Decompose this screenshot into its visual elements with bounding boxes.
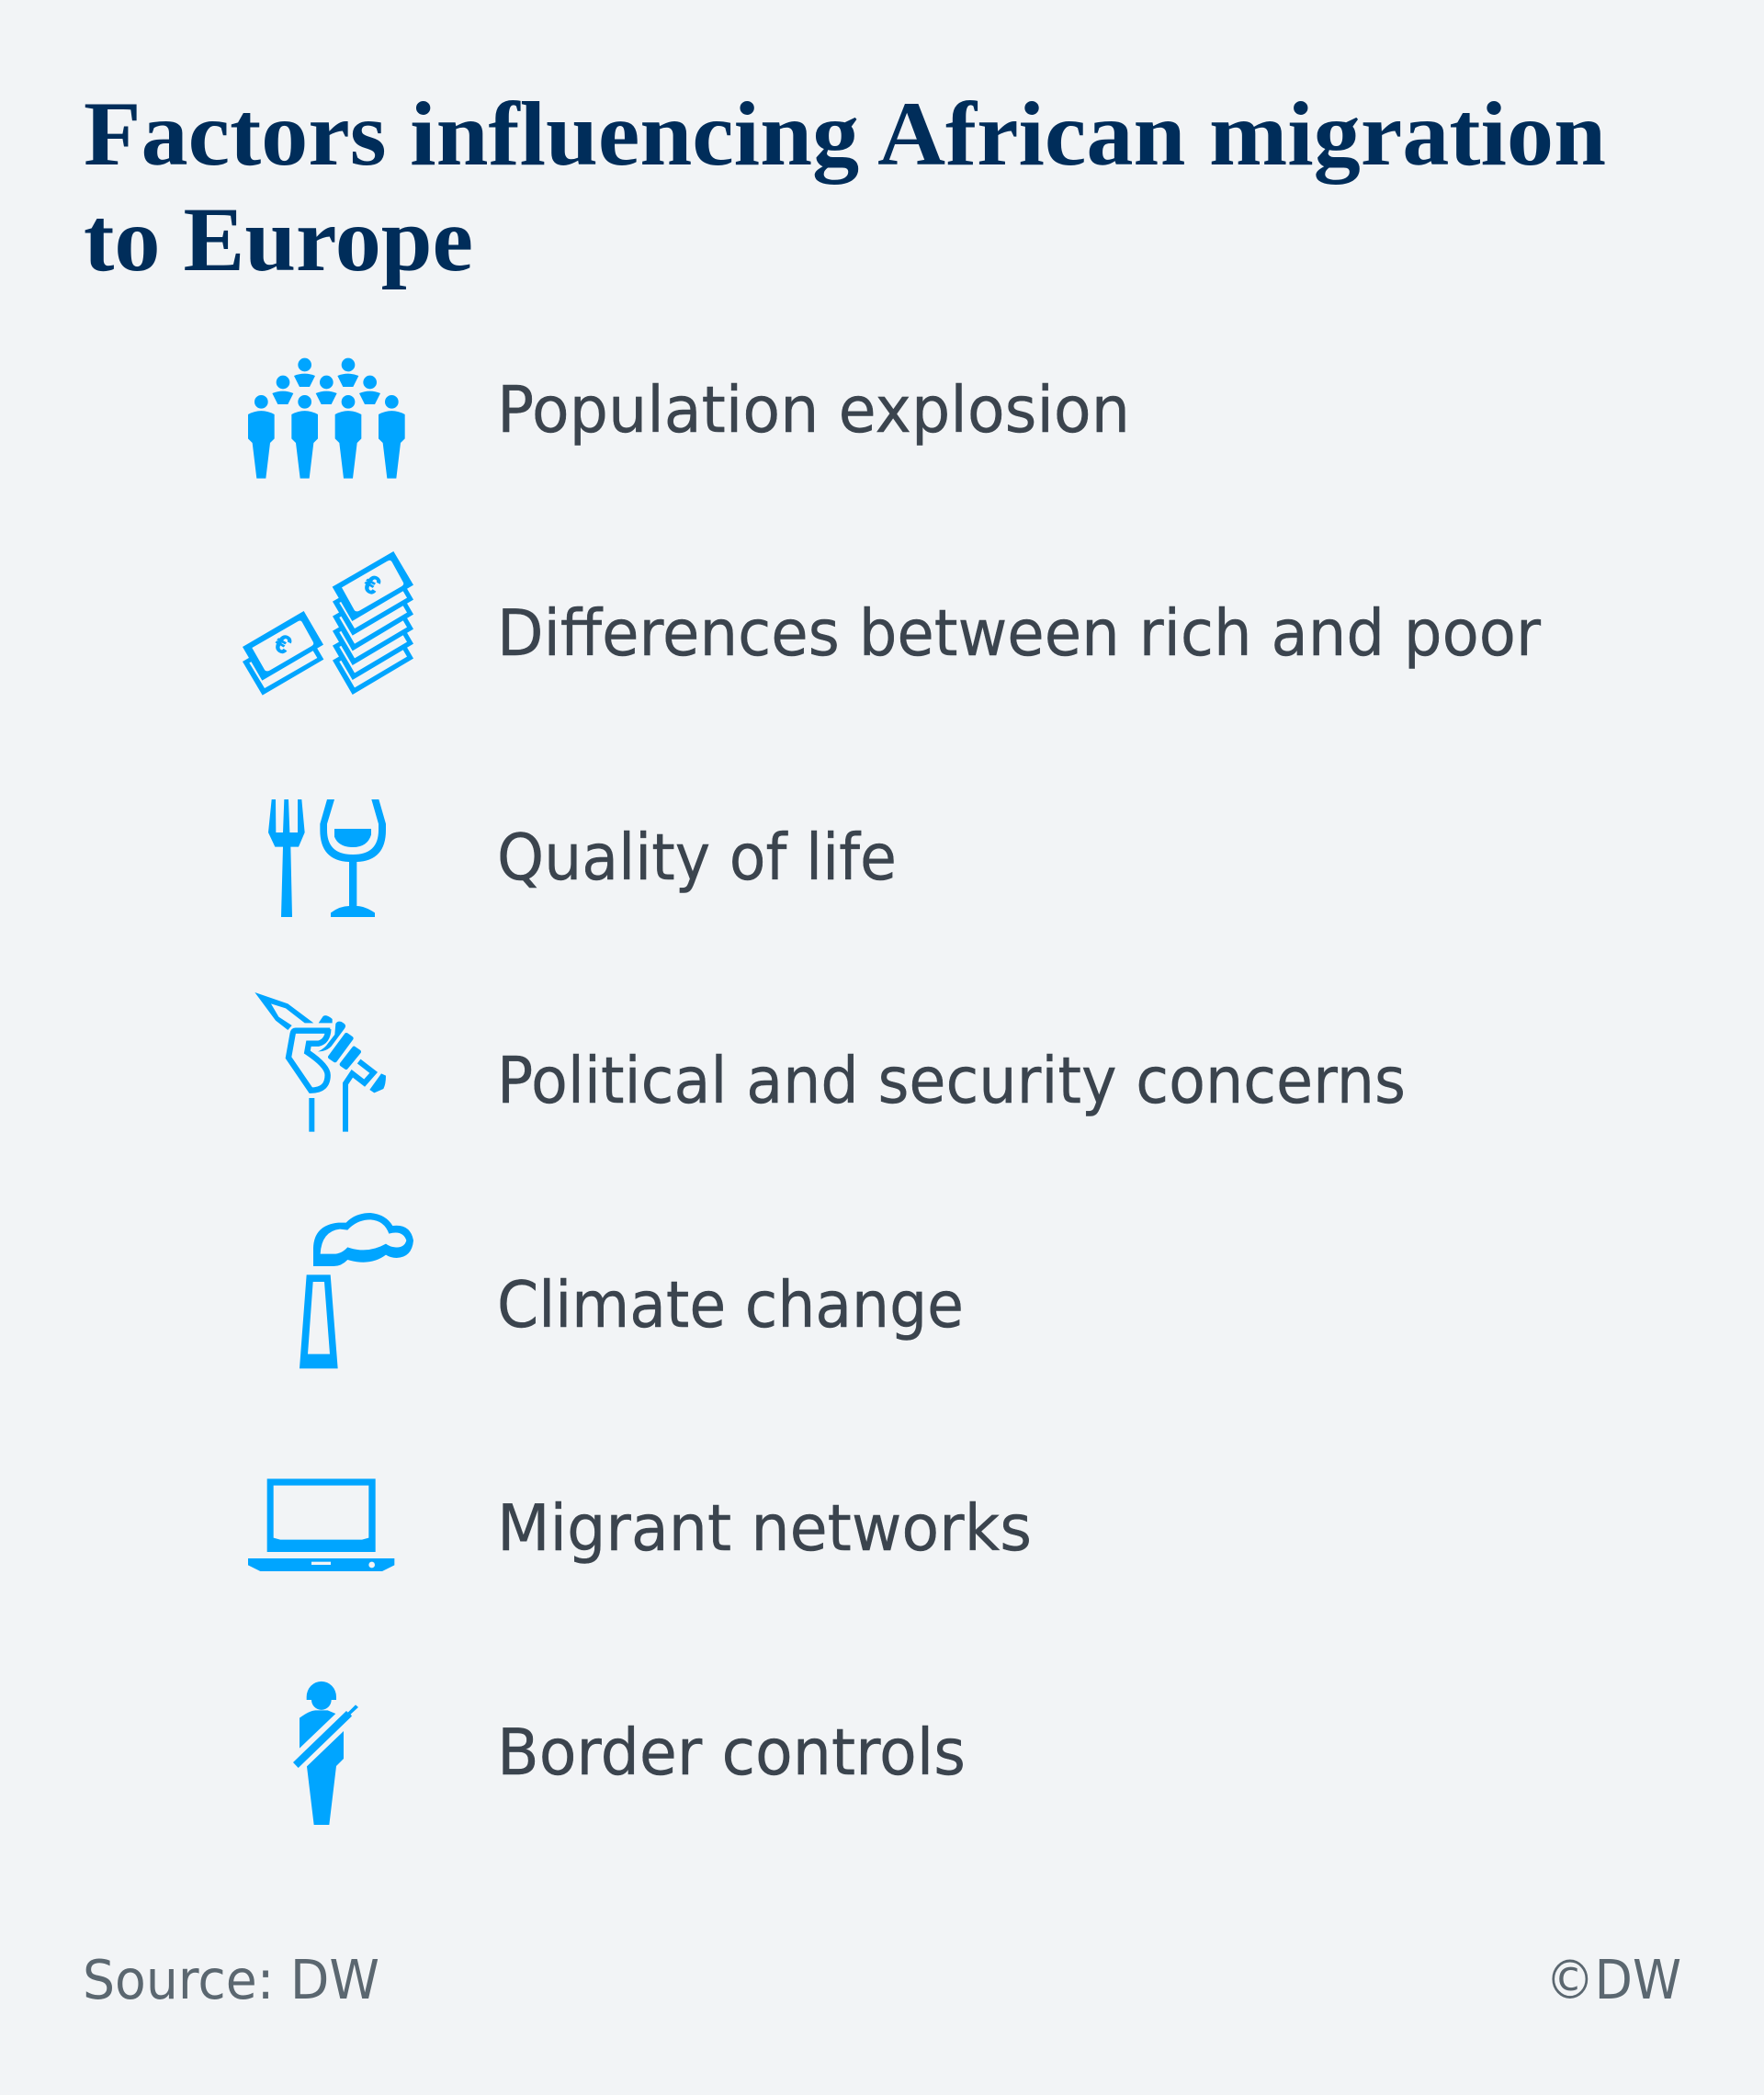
- title: [84, 83, 1606, 290]
- label: political and security concerns: Political and security concerns: [497, 1044, 1406, 1118]
- icon: fist holding a knife: [254, 992, 386, 1132]
- label: migrant networks: Migrant networks: [497, 1491, 1032, 1566]
- source note: Source: DW: [83, 1948, 379, 2011]
- copyright: ©DW: [1545, 1948, 1681, 2011]
- label: quality of life: Quality of life: [497, 821, 897, 895]
- title: Factors influencing African migration: [84, 83, 1606, 185]
- title: to Europe: [84, 188, 473, 290]
- icon: laptop: [248, 1478, 394, 1571]
- label: climate change: Climate change: [497, 1268, 964, 1342]
- icon: fork and wine glass: [268, 799, 386, 917]
- icon: stacks of euro banknotes: [243, 551, 413, 696]
- icon: stacks of euro banknotes: €: [269, 628, 297, 660]
- label: differences between rich and poor: Differences between rich and poor: [497, 596, 1541, 671]
- label: border controls: Border controls: [497, 1716, 966, 1790]
- icon: stacks of euro banknotes: €: [358, 569, 386, 601]
- icon: smoking chimney: [300, 1213, 413, 1368]
- label: population explosion: Population explosion: [497, 373, 1130, 447]
- icon: soldier with rifle: [293, 1682, 358, 1825]
- icon: crowd of people: [248, 358, 405, 479]
